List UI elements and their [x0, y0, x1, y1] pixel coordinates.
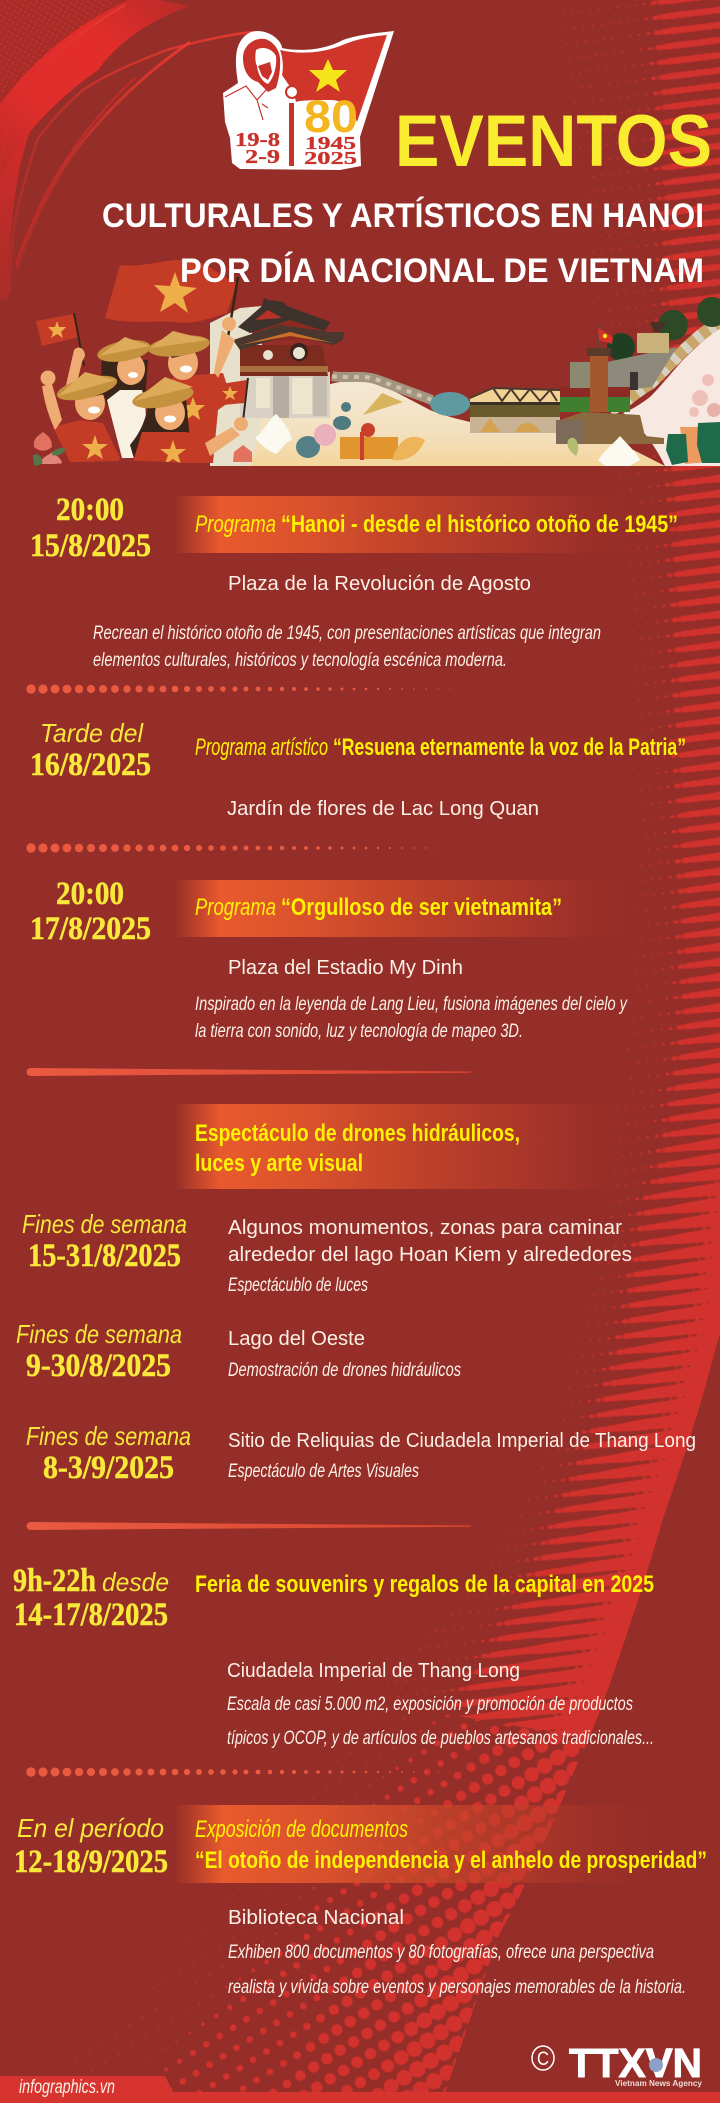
event 2: [30, 718, 686, 820]
venue: Plaza de la Revolución de Agosto: [228, 573, 531, 595]
programme name: Programa: [195, 511, 276, 538]
description: la tierra con sonido, luz y tecnología de mapeo 3D.: [195, 1021, 523, 1042]
bottom edge shadow of crowd: [30, 461, 215, 470]
illustration: monuments landscape: [210, 297, 720, 466]
date: En el período: [17, 1813, 164, 1843]
event 6: document exhibition: [14, 1805, 707, 1998]
patterned hill edge: [332, 376, 432, 400]
programme name: “Orgulloso de ser vietnamita”: [281, 894, 562, 921]
emblem number 80: 80: [304, 91, 358, 142]
date: 17/8/2025: [30, 911, 151, 947]
row 1: 15-31/8/2025: [28, 1238, 181, 1274]
top-left red swirl: [0, 0, 253, 300]
row 3: [26, 1421, 696, 1486]
logo white outline and flag: [223, 31, 394, 170]
date: 14-17/8/2025: [14, 1597, 168, 1633]
title: [102, 101, 712, 290]
Thang Long citadel: [560, 297, 720, 412]
heading: Espectáculo de drones hidráulicos,: [195, 1120, 520, 1147]
row 1: Fines de semana: [22, 1209, 187, 1239]
description: [227, 1694, 654, 1749]
emblem dates: [235, 129, 357, 168]
row 3: 8-3/9/2025: [43, 1450, 174, 1486]
boy with raised arm: [147, 317, 236, 463]
pale collage backdrop: [210, 306, 300, 466]
girl in front: [130, 377, 248, 464]
venue: Plaza del Estadio My Dinh: [228, 957, 463, 979]
illustration: crowd waving flags: [30, 260, 252, 470]
date: Tarde del: [40, 718, 144, 748]
programme name: Exposición de documentos: [195, 1816, 408, 1843]
row 3: Fines de semana: [26, 1421, 191, 1451]
globe in wordmark: [649, 2058, 663, 2072]
description: [93, 623, 601, 671]
copyright symbol: C: [537, 2049, 549, 2070]
row 2: 9-30/8/2025: [26, 1348, 171, 1384]
heading: [195, 1120, 520, 1177]
bridge: [470, 388, 560, 433]
agency name: Vietnam News Agency: [615, 2078, 702, 2088]
event 3: [30, 876, 640, 1042]
programme name: Programa artístico: [195, 734, 328, 761]
copyright and agency logo: [532, 2040, 702, 2088]
subtitle line 2: POR DÍA NACIONAL DE VIETNAM: [180, 252, 704, 290]
left small flag: [36, 313, 84, 366]
logo: 80th anniversary emblem: [223, 31, 394, 170]
date: 20:00: [56, 876, 124, 912]
venue: Jardín de flores de Lac Long Quan: [227, 798, 539, 820]
date: desde: [102, 1567, 169, 1597]
raised arm behind: [66, 348, 85, 395]
row 3: Sitio de Reliquias de Ciudadela Imperial de Thang Long: [228, 1430, 696, 1452]
date: 20:00: [56, 492, 124, 528]
TTXVN wordmark: TTXVN: [569, 2040, 702, 2086]
date: 15/8/2025: [30, 528, 151, 564]
heading: luces y arte visual: [195, 1150, 363, 1177]
beige hills: [250, 380, 665, 466]
row 2: Lago del Oeste: [228, 1328, 365, 1350]
date: 16/8/2025: [30, 747, 151, 783]
date: [30, 718, 151, 783]
large flag: [105, 260, 238, 343]
right small flag: [213, 378, 248, 430]
venue: Biblioteca Nacional: [228, 1907, 404, 1929]
footer bar with source: [0, 2076, 720, 2103]
event 4: drones, lights and visual art: [16, 1104, 696, 1486]
patterned hill strip: [610, 322, 720, 410]
heading band: [174, 1805, 668, 1883]
description: elementos culturales, históricos y tecnología escénica moderna.: [93, 650, 507, 671]
row 2: Demostración de drones hidráulicos: [228, 1360, 461, 1381]
right white hill: [623, 328, 720, 466]
date: [14, 1813, 168, 1880]
girl in white ao dai: [96, 336, 152, 458]
programme name: Programa: [195, 894, 276, 921]
source text: infographics.vn: [19, 2077, 115, 2098]
event 1: [30, 492, 678, 671]
date: [13, 1563, 169, 1633]
row 1: Algunos monumentos, zonas para caminar: [228, 1217, 622, 1239]
date: 12-18/9/2025: [14, 1844, 168, 1880]
heading band: [174, 880, 640, 937]
pagoda: Temple of Literature pavilion: [233, 298, 344, 418]
emblem dates: 2025: [304, 148, 357, 168]
date: 9h-22h: [13, 1563, 96, 1599]
Hanoi flag tower: [556, 323, 664, 444]
conical hat, pods, lotus and gifts: [255, 392, 470, 460]
copyright symbol: [532, 2046, 554, 2070]
portrait of leader: [225, 39, 298, 166]
event 5: souvenir fair: [13, 1563, 654, 1749]
programme name: [195, 734, 686, 761]
emblem dates: 2-9: [245, 146, 280, 168]
row 1: Espectácublo de luces: [228, 1275, 368, 1296]
heading band: [174, 1104, 640, 1189]
row 2: [16, 1319, 461, 1384]
vases, plum blossom, lily: [567, 374, 720, 466]
date: [30, 876, 151, 947]
row 3: Espectáculo de Artes Visuales: [228, 1461, 419, 1482]
programme name: [195, 894, 562, 921]
lotus flowers: [33, 432, 252, 466]
description: [228, 1942, 686, 1998]
row 1: alrededor del lago Hoan Kiem y alrededores: [228, 1244, 632, 1266]
description: [195, 994, 628, 1042]
emblem dates: 1945: [305, 133, 356, 153]
boy on left: [40, 370, 120, 462]
heading band: [174, 496, 640, 553]
emblem dates: 19-8: [235, 129, 280, 151]
venue: Ciudadela Imperial de Thang Long: [227, 1660, 520, 1682]
date: [30, 492, 151, 564]
row 1: [22, 1209, 632, 1296]
row 2: Fines de semana: [16, 1319, 182, 1349]
programme name: [195, 1816, 707, 1874]
